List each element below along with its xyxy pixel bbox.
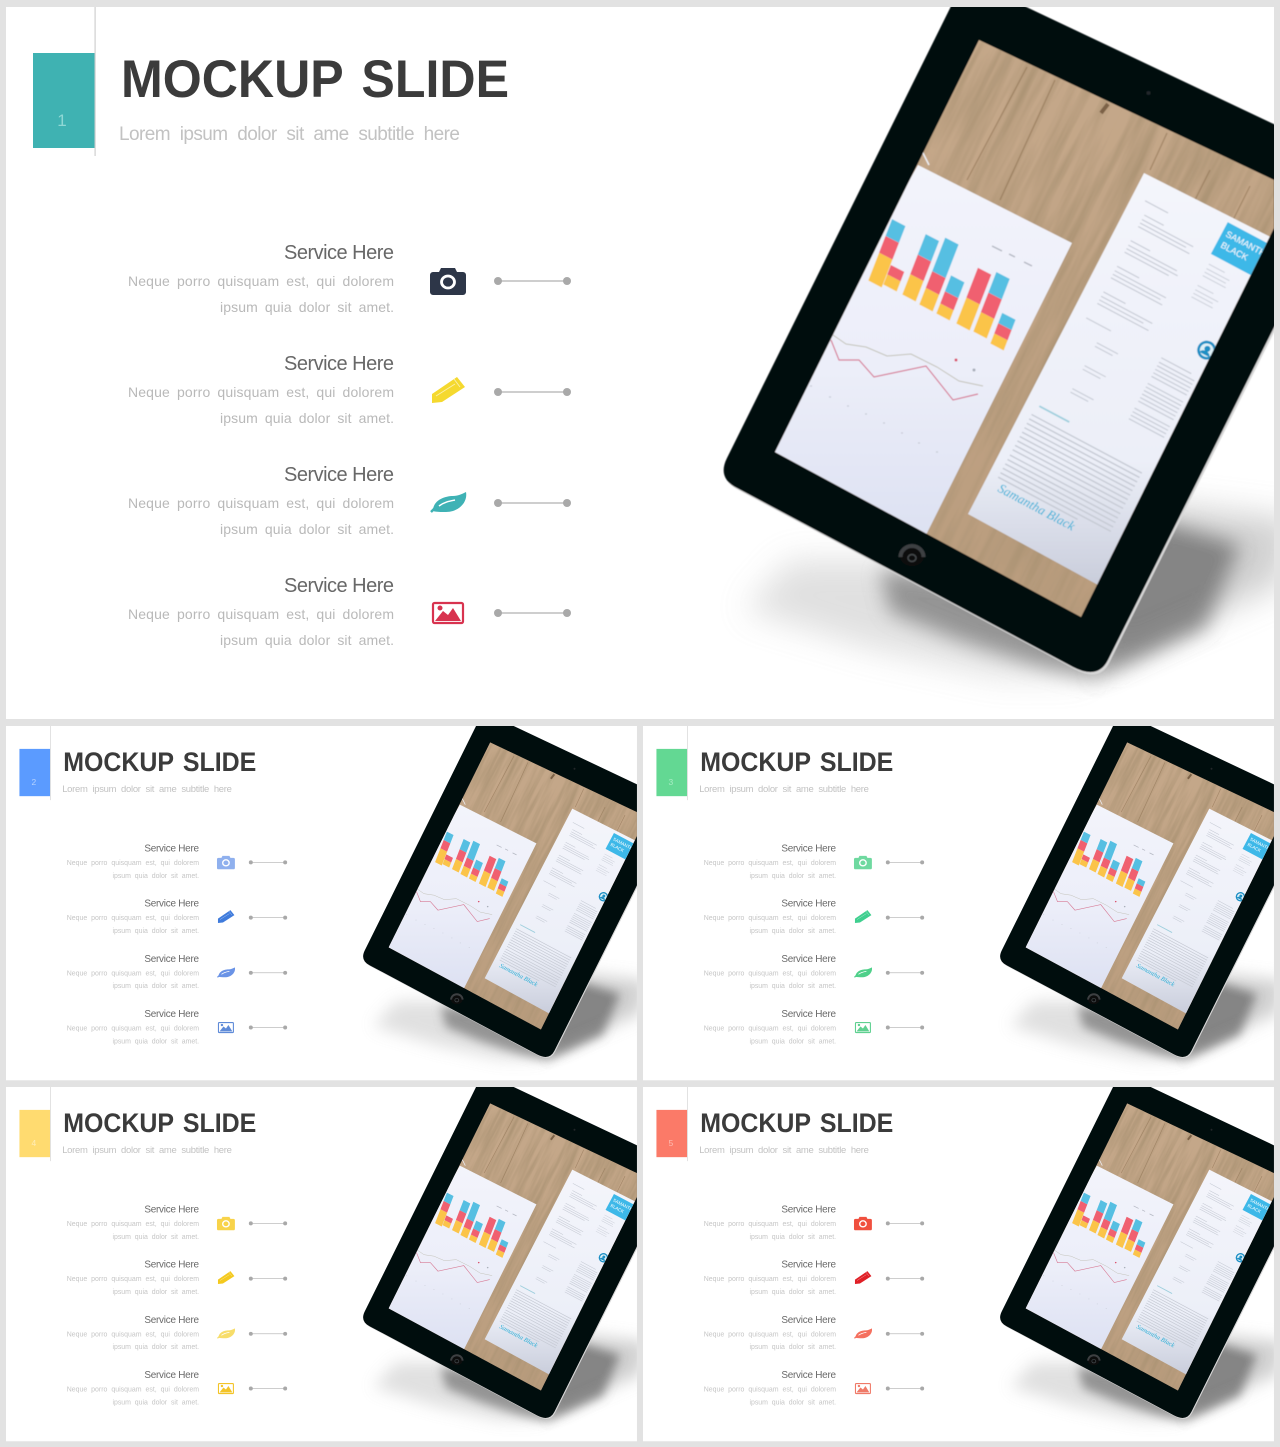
service row 1: ipsum quia dolor sit amet. xyxy=(112,1234,199,1241)
panel: coral slide xyxy=(643,1064,1280,1447)
service row 1: Service Here xyxy=(781,1204,837,1215)
service row 1: Service Here xyxy=(144,843,200,854)
service row 2 xyxy=(67,899,200,935)
icon: camera xyxy=(217,856,235,869)
vertical rule xyxy=(49,1087,52,1161)
service row 4: ipsum quia dolor sit amet. xyxy=(749,1038,836,1045)
icon: picture xyxy=(433,603,463,623)
connector xyxy=(886,860,924,864)
icon: pencil xyxy=(432,377,465,403)
tablet mockup: Samantha Black xyxy=(1135,1323,1176,1349)
service row 4: Service Here xyxy=(284,575,394,597)
accent block with number: 4 xyxy=(32,1138,37,1148)
service row 4: Service Here xyxy=(781,1009,837,1020)
service row 2: ipsum quia dolor sit amet. xyxy=(749,928,836,935)
service row 2: Service Here xyxy=(144,1260,200,1271)
service row 3 xyxy=(704,954,837,990)
service row 4: Neque porro quisquam est, qui dolorem xyxy=(704,1026,836,1033)
service row 3: ipsum quia dolor sit amet. xyxy=(112,983,199,990)
connector xyxy=(494,499,571,507)
title and subtitle: MOCKUP SLIDE xyxy=(63,747,256,777)
service row 3 xyxy=(704,1315,837,1351)
accent block with number xyxy=(19,1110,50,1157)
service row 3: Neque porro quisquam est, qui dolorem xyxy=(128,495,394,511)
tablet mockup: BLACK xyxy=(610,1203,625,1214)
service row 3: Neque porro quisquam est, qui dolorem xyxy=(704,970,836,977)
connector xyxy=(494,388,571,396)
vertical rule xyxy=(49,726,52,800)
title: MOCKUP SLIDE xyxy=(121,50,509,109)
service row 2: Neque porro quisquam est, qui dolorem xyxy=(704,1276,836,1283)
service row 3: Neque porro quisquam est, qui dolorem xyxy=(67,1331,199,1338)
service row 4: Service Here xyxy=(781,1370,837,1381)
panel: green slide xyxy=(643,726,1274,1080)
service row 4: Service Here xyxy=(144,1009,200,1020)
icon: leaf xyxy=(854,967,872,977)
connector xyxy=(886,1332,924,1336)
service row 4 xyxy=(128,575,394,648)
service row 1: Neque porro quisquam est, qui dolorem xyxy=(704,1221,836,1228)
service row 4: Neque porro quisquam est, qui dolorem xyxy=(67,1387,199,1394)
connector xyxy=(249,916,287,920)
service row 1 xyxy=(67,843,200,880)
subtitle: Lorem ipsum dolor sit ame subtitle here xyxy=(119,124,460,145)
icon: pencil xyxy=(855,910,871,923)
tablet mockup xyxy=(363,1087,637,1429)
service row 2: Neque porro quisquam est, qui dolorem xyxy=(128,384,394,400)
tablet mockup: Samantha Black xyxy=(498,1323,539,1349)
service row 2 xyxy=(67,1260,200,1296)
service row 4: ipsum quia dolor sit amet. xyxy=(749,1399,836,1406)
connector xyxy=(886,1387,924,1391)
service row 1: ipsum quia dolor sit amet. xyxy=(749,873,836,880)
tablet mockup: Samantha Black xyxy=(996,480,1078,534)
accent block with number: 5 xyxy=(669,1138,674,1148)
service row 3: Neque porro quisquam est, qui dolorem xyxy=(704,1331,836,1338)
title and subtitle xyxy=(699,747,893,795)
service row 1 xyxy=(128,242,394,315)
service row 1 xyxy=(67,1204,200,1241)
icon: leaf xyxy=(217,967,235,977)
service row 1: Service Here xyxy=(284,242,394,264)
service row 1: Service Here xyxy=(144,1204,200,1215)
service row 1 xyxy=(704,1204,837,1241)
icon: pencil xyxy=(855,1271,871,1284)
service row 4: Neque porro quisquam est, qui dolorem xyxy=(704,1387,836,1394)
service row 3 xyxy=(128,464,394,537)
accent block with number xyxy=(656,749,687,796)
panel: blue slide xyxy=(6,726,637,1080)
title and subtitle: MOCKUP SLIDE xyxy=(700,1108,893,1138)
connector xyxy=(249,1221,287,1225)
connector xyxy=(494,277,571,285)
service row 2: Neque porro quisquam est, qui dolorem xyxy=(704,915,836,922)
icon: camera xyxy=(854,856,872,869)
service row 4: ipsum quia dolor sit amet. xyxy=(220,632,394,648)
service row 3: Service Here xyxy=(781,954,837,965)
service row 2 xyxy=(704,1260,837,1296)
service row 3: ipsum quia dolor sit amet. xyxy=(112,1344,199,1351)
service row 2: ipsum quia dolor sit amet. xyxy=(112,1289,199,1296)
service row 2: Neque porro quisquam est, qui dolorem xyxy=(67,915,199,922)
tablet mockup: Samantha Black xyxy=(498,962,539,988)
connector xyxy=(886,971,924,975)
tablet mockup: BLACK xyxy=(610,842,625,853)
service row 1 xyxy=(704,843,837,880)
service row 1: Neque porro quisquam est, qui dolorem xyxy=(67,860,199,867)
service row 4: Neque porro quisquam est, qui dolorem xyxy=(128,606,394,622)
connector xyxy=(249,1026,287,1030)
service row 3: ipsum quia dolor sit amet. xyxy=(220,521,394,537)
panel: yellow slide xyxy=(6,1087,637,1442)
service row 1: ipsum quia dolor sit amet. xyxy=(220,299,394,315)
icon: camera xyxy=(430,268,466,295)
tablet mockup: BLACK xyxy=(1247,1203,1262,1214)
title and subtitle xyxy=(699,1108,893,1156)
title and subtitle xyxy=(62,1108,256,1156)
icon: camera xyxy=(854,1217,872,1230)
tablet mockup: BLACK xyxy=(1219,240,1250,263)
service row 2: Service Here xyxy=(781,899,837,910)
service row 1: ipsum quia dolor sit amet. xyxy=(112,873,199,880)
accent block with number: 2 xyxy=(32,777,37,787)
title and subtitle: MOCKUP SLIDE xyxy=(700,747,893,777)
tablet mockup xyxy=(1000,1087,1274,1429)
service row 2: ipsum quia dolor sit amet. xyxy=(220,410,394,426)
connector xyxy=(249,1387,287,1391)
tablet mockup: Samantha Black xyxy=(1135,962,1176,988)
tablet mockup xyxy=(363,726,637,1068)
title and subtitle: Lorem ipsum dolor sit ame subtitle here xyxy=(62,784,232,795)
service row 3 xyxy=(67,1315,200,1351)
accent block with number xyxy=(33,53,95,148)
icon: camera xyxy=(217,1217,235,1230)
service row 2: Neque porro quisquam est, qui dolorem xyxy=(67,1276,199,1283)
service row 4 xyxy=(704,1009,837,1045)
connector xyxy=(249,1332,287,1336)
connector xyxy=(494,609,571,617)
service row 3: ipsum quia dolor sit amet. xyxy=(749,983,836,990)
tablet mockup: SAMANTHA xyxy=(1249,836,1273,852)
service row 3: Neque porro quisquam est, qui dolorem xyxy=(67,970,199,977)
connector xyxy=(249,971,287,975)
service row 4: Service Here xyxy=(144,1370,200,1381)
title and subtitle xyxy=(62,747,256,795)
icon: leaf xyxy=(431,492,466,512)
icon: pencil xyxy=(218,1271,234,1284)
connector xyxy=(886,1026,924,1030)
accent block with number: 1 xyxy=(57,111,67,130)
tablet mockup: SAMANTHA xyxy=(612,836,636,852)
service row 3: Service Here xyxy=(284,464,394,486)
icon: pencil xyxy=(218,910,234,923)
service row 2: ipsum quia dolor sit amet. xyxy=(749,1289,836,1296)
service row 2: ipsum quia dolor sit amet. xyxy=(112,928,199,935)
connector xyxy=(886,1277,924,1281)
icon: leaf xyxy=(217,1328,235,1338)
service row 2: Service Here xyxy=(284,353,394,375)
service row 1: ipsum quia dolor sit amet. xyxy=(749,1234,836,1241)
service row 3: Service Here xyxy=(781,1315,837,1326)
service row 4 xyxy=(67,1009,200,1045)
service row 3: ipsum quia dolor sit amet. xyxy=(749,1344,836,1351)
tablet mockup xyxy=(1000,726,1274,1068)
tablet mockup xyxy=(722,7,1274,694)
tablet mockup: BLACK xyxy=(1247,842,1262,853)
connector xyxy=(886,1221,924,1225)
tablet mockup: SAMANTHA xyxy=(1249,1197,1273,1213)
icon: picture xyxy=(218,1023,233,1033)
service row 3: Service Here xyxy=(144,954,200,965)
title and subtitle: Lorem ipsum dolor sit ame subtitle here xyxy=(62,1145,232,1156)
title and subtitle: MOCKUP SLIDE xyxy=(63,1108,256,1138)
service row 4: ipsum quia dolor sit amet. xyxy=(112,1399,199,1406)
connector xyxy=(249,1277,287,1281)
service row 2 xyxy=(128,353,394,426)
icon: picture xyxy=(855,1384,870,1394)
icon: picture xyxy=(855,1023,870,1033)
accent block with number xyxy=(19,749,50,796)
service row 1: Neque porro quisquam est, qui dolorem xyxy=(704,860,836,867)
vertical rule xyxy=(686,726,689,800)
tablet mockup: SAMANTHA xyxy=(612,1197,636,1213)
service row 1: Neque porro quisquam est, qui dolorem xyxy=(128,273,394,289)
tablet mockup: SAMANTHA xyxy=(1224,229,1273,261)
title and subtitle: Lorem ipsum dolor sit ame subtitle here xyxy=(699,784,869,795)
vertical rule xyxy=(94,7,96,156)
service row 4 xyxy=(704,1370,837,1406)
panel: main slide xyxy=(6,7,1274,719)
service row 2 xyxy=(704,899,837,935)
service row 1: Neque porro quisquam est, qui dolorem xyxy=(67,1221,199,1228)
vertical rule xyxy=(686,1087,689,1161)
service row 1: Service Here xyxy=(781,843,837,854)
accent block with number: 3 xyxy=(669,777,674,787)
connector xyxy=(886,916,924,920)
icon: picture xyxy=(218,1384,233,1394)
accent block with number xyxy=(656,1110,687,1157)
service row 3 xyxy=(67,954,200,990)
title and subtitle: Lorem ipsum dolor sit ame subtitle here xyxy=(699,1145,869,1156)
service row 2: Service Here xyxy=(144,899,200,910)
service row 4 xyxy=(67,1370,200,1406)
service row 3: Service Here xyxy=(144,1315,200,1326)
service row 4: Neque porro quisquam est, qui dolorem xyxy=(67,1026,199,1033)
connector xyxy=(249,860,287,864)
service row 2: Service Here xyxy=(781,1260,837,1271)
icon: leaf xyxy=(854,1328,872,1338)
service row 4: ipsum quia dolor sit amet. xyxy=(112,1038,199,1045)
